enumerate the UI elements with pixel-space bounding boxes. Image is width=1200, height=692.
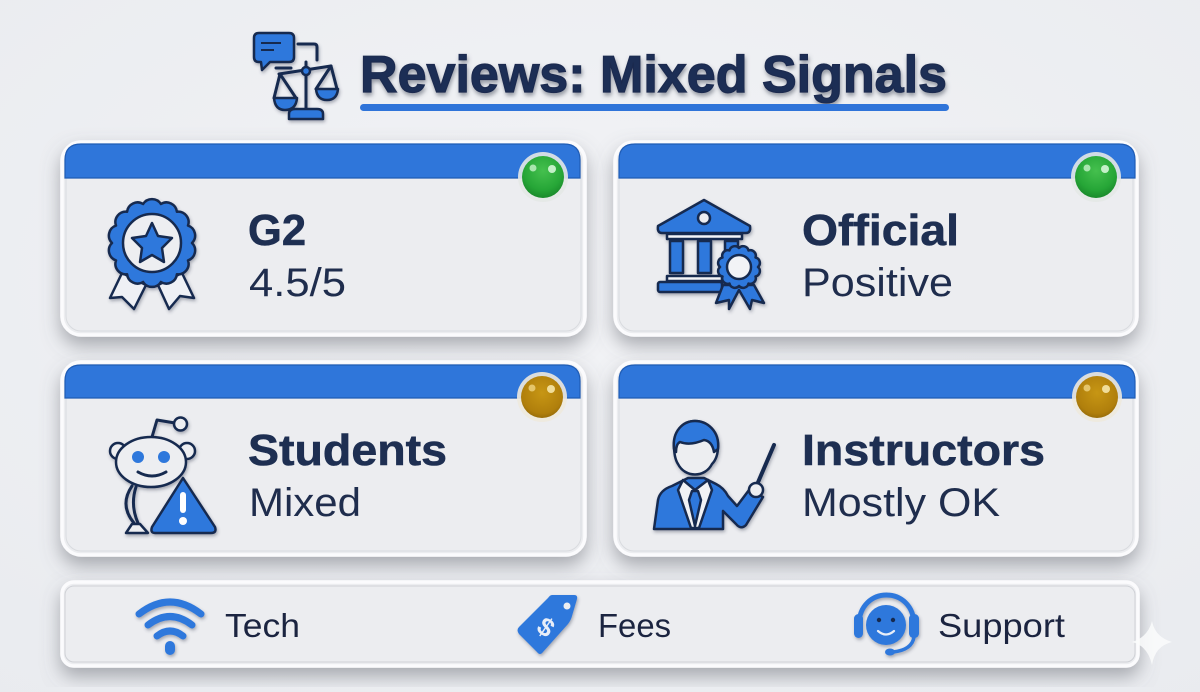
label: Support: Support <box>938 607 1065 644</box>
icon: instructor with pointer <box>654 421 774 529</box>
status light: green <box>1071 152 1121 202</box>
label: G2: G2 <box>248 206 306 255</box>
header bar <box>65 365 580 398</box>
value: Mostly OK: Mostly OK <box>802 481 1000 525</box>
panel: Instructors <box>615 362 1137 555</box>
header icon: chat bubble and scales <box>254 33 338 119</box>
status light: amber <box>517 372 567 422</box>
icon: support headset <box>854 595 919 656</box>
panel: Official <box>615 142 1137 335</box>
label: Fees: Fees <box>598 607 671 644</box>
header bar <box>619 144 1135 178</box>
icon: mascot with warning triangle <box>110 418 216 533</box>
icon: price tag <box>518 595 577 654</box>
value: Positive: Positive <box>802 261 953 305</box>
label: Instructors: Instructors <box>802 426 1045 475</box>
status light: green <box>518 152 568 202</box>
label: Official: Official <box>802 206 959 255</box>
status light: amber <box>1072 372 1122 422</box>
icon: rosette badge <box>109 199 195 309</box>
value: Mixed: Mixed <box>249 481 361 525</box>
label: Tech: Tech <box>225 607 300 644</box>
icon: wifi <box>139 602 201 650</box>
panel: issue strip <box>62 582 1138 666</box>
panel: G2 <box>62 142 585 335</box>
icon: price tag: $ <box>531 611 561 644</box>
label: Students: Students <box>248 426 447 475</box>
panel: Students <box>62 362 585 555</box>
header bar <box>619 365 1135 398</box>
value: 4.5/5: 4.5/5 <box>249 261 346 305</box>
sparkle watermark <box>1132 621 1172 665</box>
title underline <box>360 104 949 111</box>
icon: institution with seal <box>658 200 764 309</box>
header bar <box>65 144 580 178</box>
title: Reviews: Mixed Signals <box>360 46 947 104</box>
